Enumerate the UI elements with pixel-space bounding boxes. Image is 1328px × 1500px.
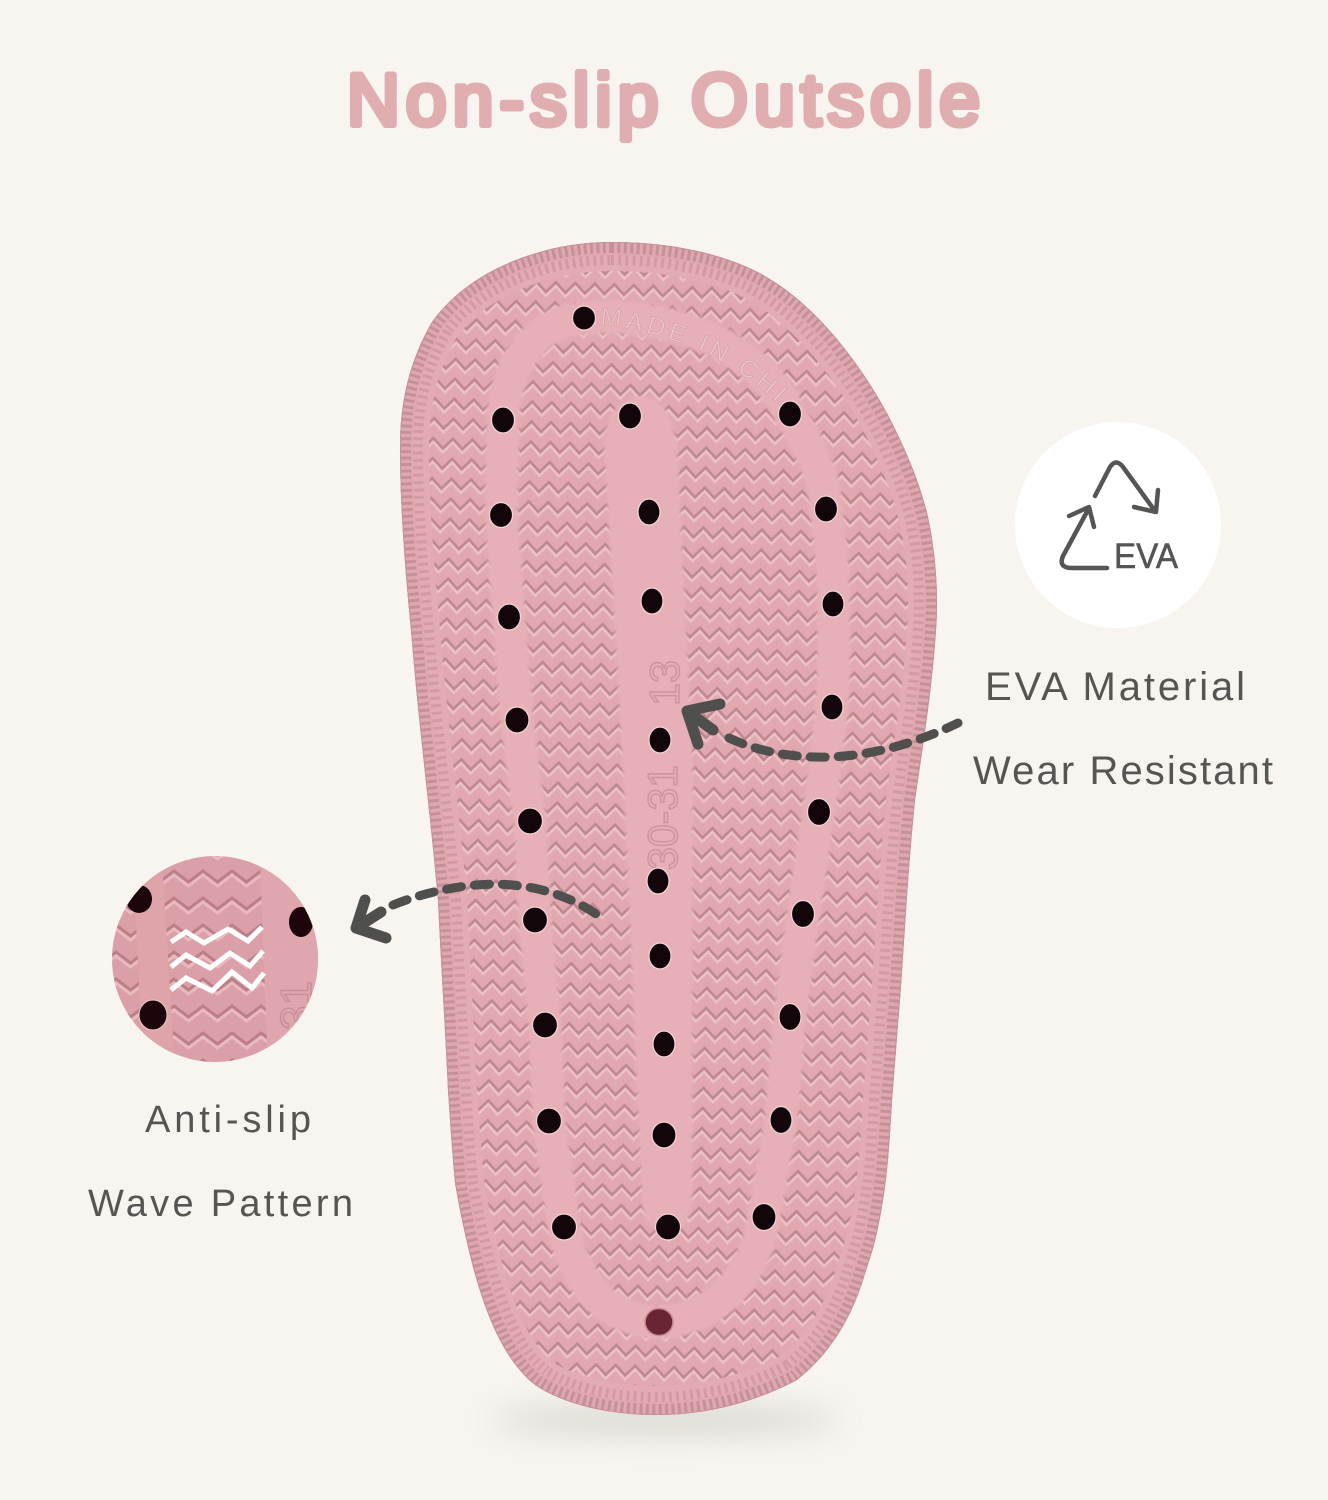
EVA text: EVA [1114,537,1179,576]
inset holes [126,885,152,913]
inset moulded number: 31 [272,981,321,1030]
sole shadow [490,1406,840,1434]
rim band [400,242,937,1415]
label: Wave Pattern: Wave Pattern [88,1183,353,1225]
smooth centre channel [604,397,693,1234]
inset: wave pattern detail [112,856,330,1070]
drainage holes [490,306,844,1240]
label: Wear Resistant: Wear Resistant [973,749,1273,793]
icon: recycle triangle [1062,462,1158,568]
moulded text: size 30-31: 30-31 [639,765,686,870]
label: EVA Material: EVA Material [985,665,1245,709]
slipper outsole [218,242,937,1415]
title: Non-slip Outsole [347,60,980,141]
arrow: to sole from EVA label [687,704,958,757]
moulded text: size 13: 13 [641,660,688,706]
bottom hole [645,1308,673,1336]
white wave lines [171,927,264,991]
white circle [1015,422,1221,628]
smooth ring channel [501,317,834,1322]
arrow: to wave pattern inset [356,884,603,938]
inset circle [112,856,318,1062]
label: Anti-slip: Anti-slip [145,1099,311,1141]
inset channels [135,870,174,1054]
sole base with wave tread [400,242,937,1415]
EVA badge [1015,422,1221,628]
